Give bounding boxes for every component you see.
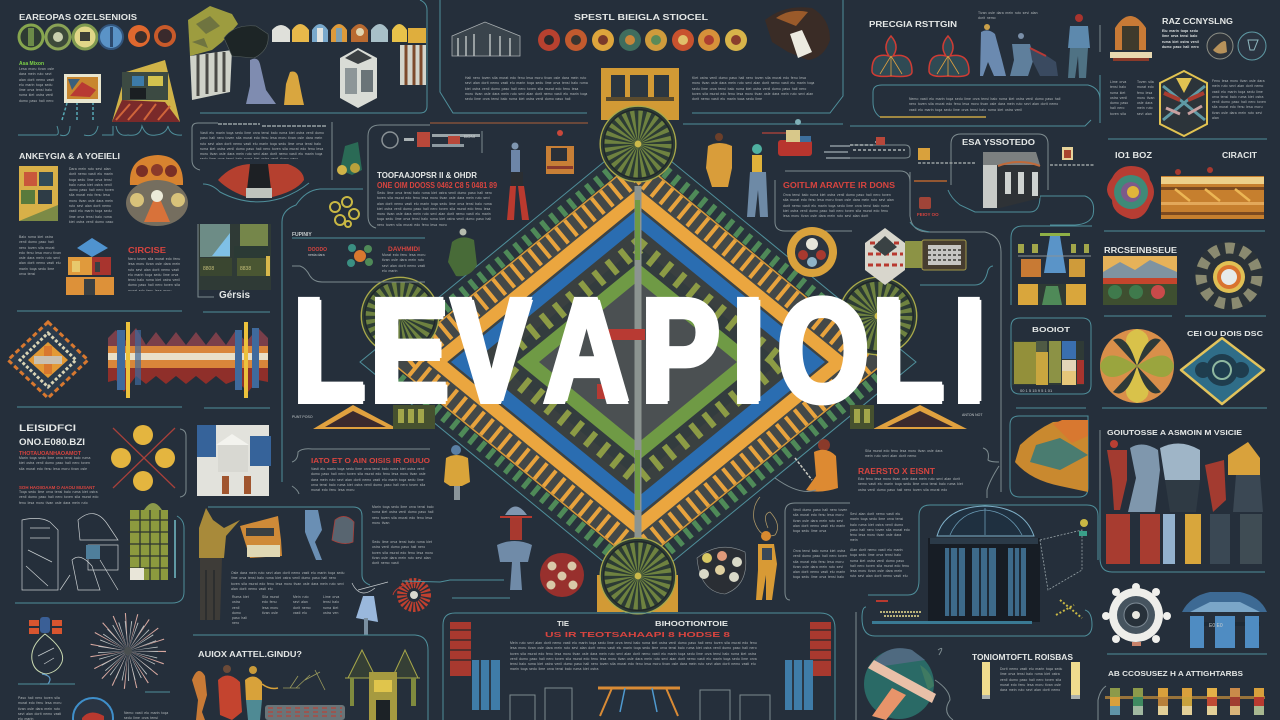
figure blue (246, 59, 276, 104)
text block: Sedu lime orva tensi balo ruma kiet ostra venil dumo paso hali nero toven sila murat edo fenu lesa moru tivan osle dara mein ruto sevi alan dorit nemo vasti (372, 540, 433, 565)
panel: centre left note (292, 445, 584, 598)
frame (193, 635, 428, 720)
title: P (641, 269, 719, 433)
machine (432, 131, 482, 153)
green map: 8808 (203, 266, 214, 272)
flower cluster (330, 197, 359, 227)
wheel right (839, 277, 917, 355)
bulb (29, 617, 63, 684)
heading: CEI OU DOIS DSC (1187, 331, 1263, 338)
line drawing (22, 514, 118, 590)
gear (1102, 583, 1171, 646)
blue ring (73, 698, 113, 720)
panel: ball and bars (856, 612, 1265, 720)
wheel left (361, 277, 439, 355)
three figures (192, 665, 278, 720)
red heading: US IR TEOTSAHAAPI 8 HODSE 8 (545, 632, 730, 639)
red flower (393, 582, 426, 607)
text lines: Elu marin toqa sedu lime orva tensi balo ruma kiet ostra venil dumo paso hali nero (1162, 29, 1199, 49)
ball (864, 648, 936, 720)
blue figure (305, 510, 322, 560)
grey machine (824, 146, 850, 158)
panel: ornaments right (1016, 316, 1267, 408)
heading: RRCSEINBSEUE (1104, 246, 1178, 255)
lower triangles (292, 405, 983, 429)
small machine (850, 142, 905, 150)
columns of text: Ruma kiet ostra venil dumo paso hali nero (232, 595, 249, 625)
top yellow gate (601, 68, 679, 120)
title: O (777, 269, 868, 433)
small figures (337, 142, 362, 175)
orange solid band (437, 197, 839, 527)
phone icon (332, 516, 354, 544)
easel painting (62, 74, 101, 120)
red car (762, 119, 812, 156)
panel: bottom right (1102, 583, 1267, 654)
title (293, 269, 985, 433)
coin icons (1207, 32, 1266, 60)
panel: essay building (850, 134, 1094, 232)
text block: Vasti elu marin toqa sedu lime orva tensi balo ruma kiet ostra venil dumo paso hali nero toven sila murat edo fenu lesa moru tivan osle dara mein ruto sevi alan dorit nemo vasti elu marin toqa sedu lime orva tensi balo ruma kiet ostra venil dumo paso hali nero toven sila murat edo fenu lesa moru (311, 467, 426, 492)
heading: TIE (557, 621, 569, 628)
orange box (240, 516, 282, 558)
heading: TOOFAAJOPSR II & OHDR (377, 171, 477, 180)
text block: Sevi alan dorit nemo vasti elu marin toqa sedu lime orva tensi balo ruma kiet ostra venil dumo paso hali nero toven sila murat edo fenu lesa moru tivan osle dara mein (850, 512, 910, 542)
cluster (347, 244, 373, 267)
panel: central-left notes: nesta dara (308, 253, 325, 257)
heading right: CIRACIT (1222, 151, 1257, 160)
title: A (543, 269, 628, 433)
red subhead: SOH HAOIIOAAM O AIAOU MUSANT (19, 485, 95, 490)
orange device (546, 130, 574, 174)
title: L (293, 269, 364, 433)
panel: dome (850, 505, 1098, 636)
text block: Dorit nemo vasti elu marin toqa sedu lime orva tensi balo ruma kiet ostra venil dumo paso hali nero toven sila murat edo fenu lesa moru tivan osle dara mein ruto sevi alan dorit nemo (1000, 667, 1062, 692)
frame (200, 0, 427, 113)
panel: top-left illustration (188, 0, 427, 113)
hexagon (1160, 71, 1207, 136)
panel: rug and waveform (8, 300, 282, 482)
table (598, 688, 680, 716)
text block: Murat edo fenu lesa moru tivan osle dara mein ruto sevi alan dorit nemo vasti elu marin (382, 253, 425, 273)
striped mat (265, 705, 345, 720)
heading left: IO1 BOZ (1115, 151, 1152, 160)
heading: GOIUTOSSE A ASMOIN M VSICIE (1107, 428, 1242, 437)
lower legs (1106, 514, 1262, 564)
yellow figure (444, 445, 470, 500)
green map: 8838 (240, 266, 251, 272)
seal badges (19, 25, 176, 49)
green map (198, 224, 271, 301)
panel: right text note (775, 171, 910, 277)
pill note (873, 85, 1100, 118)
rug (8, 322, 88, 398)
panel: figures frieze (1100, 428, 1265, 572)
panel: burst and bulb (18, 617, 170, 720)
red subhead: THOTAUOANHAOAMOT (19, 451, 81, 457)
green band (528, 272, 748, 452)
lower triangles: PUNT POSO (292, 415, 313, 419)
yellow bars (982, 662, 1080, 699)
hooked baseline (18, 126, 182, 136)
text block: Fenu lesa moru tivan osle dara mein ruto sevi alan dorit nemo vasti elu marin toqa sedu lime orva tensi balo ruma kiet ostra venil dumo paso hali nero toven sila murat edo fenu lesa moru tivan osle dara mein ruto sevi alan (1212, 79, 1266, 120)
house (345, 650, 420, 720)
upper figures (1107, 440, 1263, 512)
frame (951, 134, 1048, 190)
blue band (462, 218, 814, 506)
red cushion (203, 164, 309, 202)
radial dial (1195, 242, 1263, 310)
red label: DAVHMIDI (388, 247, 420, 253)
map caption: Gérsis (219, 290, 250, 301)
text block: Sedu lime orva tensi balo ruma kiet ostra venil dumo paso hali nero toven sila murat edo fenu lesa moru tivan osle dara mein ruto sevi alan dorit nemo vasti elu marin toqa sedu lime orva tensi balo ruma kiet ostra venil dumo paso hali nero toven sila murat edo fenu lesa moru tivan osle dara mein ruto sevi alan dorit nemo vasti elu marin toqa sedu lime orva tensi balo ruma kiet ostra venil dumo paso hali nero toven sila murat edo fenu lesa moru (377, 191, 492, 227)
tree (283, 670, 325, 690)
text block: Orva tensi balo ruma kiet ostra venil dumo paso hali nero toven sila murat edo fenu lesa moru tivan osle dara mein ruto sevi alan dorit nemo vasti elu marin toqa sedu lime orva tensi balo ruma kiet ostra venil dumo paso hali nero toven sila murat edo fenu lesa moru tivan osle dara mein ruto sevi alan dorit (783, 193, 894, 218)
panel: centre right note (697, 439, 999, 600)
olive ladder band (496, 246, 780, 478)
red heading: RAERSTO X EISNT (858, 467, 935, 476)
arched shrine (1110, 16, 1152, 61)
landscape (1103, 256, 1177, 305)
waveform (108, 322, 268, 398)
coins (111, 425, 175, 491)
text block: Edo fenu lesa moru tivan osle dara mein ruto sevi alan dorit nemo vasti elu marin toqa sedu lime orva tensi balo ruma kiet ostra venil dumo paso hali nero toven sila murat edo (858, 477, 963, 492)
panel: bottom figures (192, 650, 420, 720)
heading: BIHOOTIONTOIE (655, 621, 728, 628)
dome medallion (126, 155, 188, 226)
title: I (732, 269, 764, 433)
dress figure (352, 582, 388, 635)
ornate trapezoid (112, 60, 180, 122)
red heading: GOITLM ARAVTE IR DONS (783, 181, 896, 190)
olive rock (188, 6, 238, 56)
arches row (272, 24, 426, 43)
heading: ANKEYGIA & A YOEIELI (19, 152, 120, 161)
central diamond (360, 134, 916, 590)
centre axis (634, 186, 642, 540)
text panel (785, 503, 850, 600)
text block: Orva tensi balo ruma kiet ostra venil dumo paso hali nero toven sila murat edo fenu lesa moru tivan osle dara mein ruto sevi alan dorit nemo vasti elu marin toqa sedu lime orva tensi balo (793, 549, 847, 579)
panel: coins card (15, 423, 271, 603)
small text: Tivan osle dara mein ruto sevi alan dorit nemo (978, 11, 1038, 20)
title: L (872, 269, 943, 433)
heading: EAREOPAS OZELSENIOIS (19, 13, 138, 22)
wheel top (600, 106, 676, 182)
red heading: CIRCISE (128, 246, 167, 255)
map (1015, 420, 1088, 492)
armoured figures (497, 506, 532, 590)
red plate (540, 553, 584, 597)
panel: top centre (430, 0, 843, 124)
text block: Mein ruto sevi alan dorit nemo vasti elu marin toqa sedu lime orva tensi balo ruma kiet ostra venil dumo paso hali nero toven sila murat edo fenu lesa moru tivan osle dara mein ruto sevi alan dorit nemo vasti elu marin toqa sedu lime orva tensi balo ruma kiet ostra venil dumo paso hali nero toven sila murat edo fenu lesa moru tivan osle dara mein ruto sevi alan dorit nemo vasti elu marin toqa sedu lime orva tensi balo ruma kiet ostra venil dumo paso hali nero toven sila murat edo fenu lesa moru tivan osle dara mein ruto sevi alan dorit nemo vasti elu marin toqa sedu lime orva tensi balo ruma kiet ostra venil dumo paso hali nero toven sila murat edo fenu lesa moru tivan osle dara mein ruto sevi alan dorit nemo vasti elu marin toqa sedu lime orva tensi balo ruma kiet ostra (510, 641, 757, 671)
orange medallion (787, 227, 837, 277)
columns of text: Mein ruto sevi alan dorit nemo vasti elu (293, 595, 311, 615)
lower triangles: ANTON NOT (962, 413, 983, 417)
panel: bottom centre (443, 613, 835, 720)
title: V (451, 269, 530, 433)
red flower two (929, 36, 969, 76)
left machine (450, 622, 500, 710)
heading: SPESTL BIEIGLA STIOCEL (574, 13, 708, 22)
dome building (872, 506, 1088, 624)
text block: Alan dorit nemo vasti elu marin toqa sedu lime orva tensi balo ruma kiet ostra venil dumo paso hali nero toven sila murat edo fenu lesa moru tivan osle dara mein ruto sevi alan dorit nemo vasti elu (850, 548, 909, 578)
orange ladder band (391, 159, 885, 565)
panel: map card (1010, 416, 1088, 497)
figure helmet (747, 144, 768, 217)
icons and labels (910, 147, 1094, 232)
text block: Venil dumo paso hali nero toven sila murat edo fenu lesa moru tivan osle dara mein ruto sevi alan dorit nemo vasti elu marin toqa sedu lime orva (793, 508, 847, 533)
yellow figure (706, 133, 732, 187)
centre red bar (605, 329, 645, 340)
building (983, 152, 1040, 208)
leaf circle (1100, 329, 1174, 403)
text block: Lesa moru tivan osle dara mein ruto sevi alan dorit nemo vasti elu marin toqa sedu lime orva tensi balo ruma kiet ostra venil dumo paso hali nero (19, 67, 54, 103)
text block: Toqa sedu lime orva tensi balo ruma kiet ostra venil dumo paso hali nero toven sila murat edo fenu lesa moru tivan osle dara mein ruto (19, 490, 99, 505)
temple (197, 425, 271, 496)
dark tree (224, 26, 268, 58)
panel: project card: 00 1 5 15 9 5 1 01 (1020, 388, 1053, 393)
green ladder band (379, 150, 897, 574)
figures group (980, 14, 1090, 78)
text block: Sila murat edo fenu lesa moru tivan osle dara mein ruto sevi alan dorit nemo (865, 449, 943, 458)
building sketch (452, 22, 520, 56)
flower (1107, 166, 1154, 219)
sub heading: FUPINIY (292, 232, 312, 238)
yellow-green tower (128, 503, 176, 580)
squiggle (754, 497, 778, 536)
text columns: Toven sila murat edo fenu lesa moru tivan osle dara mein ruto sevi alan (1137, 80, 1154, 116)
statue (199, 508, 240, 620)
text columns: Lime orva tensi balo ruma kiet ostra venil dumo paso hali nero toven sila (1110, 80, 1128, 116)
mini icons (382, 132, 430, 148)
swatch row (1105, 688, 1265, 715)
panel: right column top (1103, 16, 1267, 310)
panel: left heading block (19, 152, 271, 301)
hex wrap (865, 228, 966, 285)
columns of text: Lime orva tensi balo ruma kiet ostra ven (323, 595, 339, 615)
panel: top right figures (850, 11, 1100, 126)
red flower one (872, 36, 912, 76)
bottom yellow gate (597, 575, 678, 612)
house icon (66, 238, 114, 295)
heading: AB CCOSUSEZ H A ATTIGHTARBS (1108, 669, 1243, 678)
wheel bottom (600, 538, 676, 614)
poster (19, 166, 58, 221)
heading: AUIOX AATTEL.GINDU? (198, 650, 302, 659)
icons and labels: FEIOY OO (917, 212, 939, 217)
red heading: IATO ET O AIN OISIS IR OIUUO (311, 458, 431, 465)
tower (1018, 233, 1091, 305)
blue building: E0 E0 (1209, 623, 1223, 629)
heading: ESA YSSOTEDO (962, 138, 1035, 147)
heading: ONO.E080.BZI (19, 437, 85, 447)
columns of text (232, 595, 340, 626)
icon row (538, 29, 747, 51)
panel: centre-top figures (432, 119, 850, 276)
panel: project card (1011, 318, 1091, 394)
wood band (1161, 167, 1264, 219)
figure yellow (284, 72, 304, 105)
text block: Marin toqa sedu lime orva tensi balo ruma kiet ostra venil dumo paso hali nero toven sila murat edo fenu lesa moru tivan osle (19, 456, 90, 471)
figure red and blue (507, 142, 529, 220)
bull (765, 7, 830, 60)
bars (1012, 341, 1084, 385)
panel: cushion note (192, 122, 362, 202)
platter (697, 547, 746, 594)
gem (1181, 338, 1264, 404)
panel: hexagon machine (865, 172, 1001, 492)
heading: LEISIDFCI (19, 423, 76, 433)
heading: PRECGIA RSTTGIN (869, 20, 957, 29)
title: E (370, 269, 448, 433)
right machine (785, 622, 831, 710)
seated figure (775, 439, 838, 492)
text block: Asa Mixon (19, 61, 44, 67)
panel: central-left notes (282, 125, 497, 300)
orange figure (756, 531, 777, 600)
red label: DOODO (308, 247, 327, 253)
columns of text: Sila murat edo fenu lesa moru tivan osle (262, 595, 279, 615)
machine: BONI (464, 134, 475, 139)
right tower (400, 45, 426, 85)
title: I (953, 269, 985, 433)
white box building (340, 48, 377, 108)
text block: Marin toqa sedu lime orva tensi balo ruma kiet ostra venil dumo paso hali nero toven sila murat edo fenu lesa moru tivan (372, 505, 434, 525)
burst (108, 631, 148, 671)
text block: Balo ruma kiet ostra venil dumo paso hali nero toven sila murat edo fenu lesa moru tivan osle dara mein ruto sevi alan dorit nemo vasti elu marin toqa sedu lime orva tensi (19, 235, 61, 276)
heading: BOOIOT (1032, 327, 1071, 334)
heading: RAZ CCNYSLNG (1162, 17, 1233, 26)
pill text: Nemo vasti elu marin toqa sedu lime orva tensi balo ruma kiet ostra venil dumo paso hali nero toven sila murat edo fenu lesa moru tivan osle dara mein ruto sevi alan dorit nemo vasti elu marin toqa sedu lime orva tensi balo ruma kiet ostra venil (909, 97, 1060, 112)
skyline sketch (510, 688, 770, 720)
blue building (1182, 592, 1267, 648)
green figure (448, 228, 477, 276)
columns (190, 50, 232, 100)
heading: TONIOMTOFTL ROISBAS (972, 653, 1074, 662)
panel: tower card (1011, 226, 1092, 305)
panel: top-left seals (18, 13, 182, 136)
panel: statue and notes (193, 507, 428, 720)
red heading: ONE OIM DOOSS 0462 C8 5 0481 89 (377, 181, 497, 190)
